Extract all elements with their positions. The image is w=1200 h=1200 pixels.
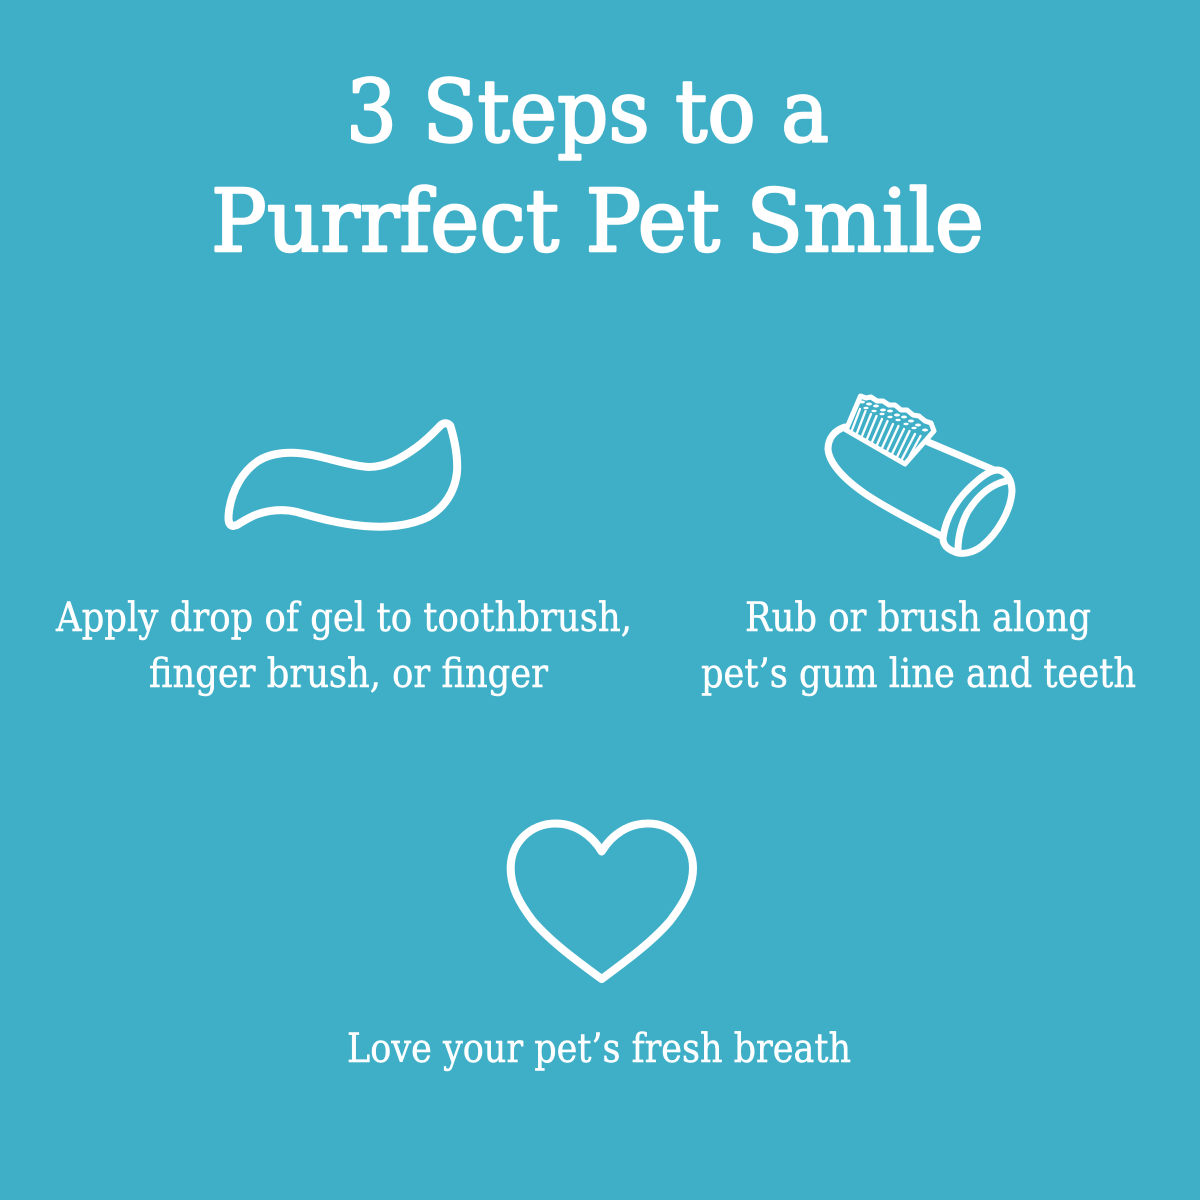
icon: finger brush bbox=[828, 396, 1012, 553]
title: 3 Steps to a bbox=[346, 62, 829, 162]
finger sleeve bbox=[828, 427, 1012, 553]
step 2 text bbox=[701, 595, 1136, 697]
brush head bbox=[846, 396, 934, 464]
step 1 text bbox=[55, 595, 632, 697]
step 2 text: Rub or brush along bbox=[745, 595, 1091, 641]
icon: heart bbox=[511, 824, 693, 979]
step 3 text: Love your pet’s fresh breath bbox=[347, 1026, 851, 1072]
title: Purrfect Pet Smile bbox=[211, 172, 984, 272]
icon: toothpaste gel bbox=[228, 423, 457, 527]
bristles bbox=[852, 409, 920, 459]
bristle tips bbox=[859, 400, 928, 432]
step 1 text: finger brush, or finger bbox=[149, 651, 549, 697]
step 1 text: Apply drop of gel to toothbrush, bbox=[55, 595, 632, 641]
title bbox=[211, 62, 984, 272]
step 2 text: pet’s gum line and teeth bbox=[701, 651, 1136, 697]
